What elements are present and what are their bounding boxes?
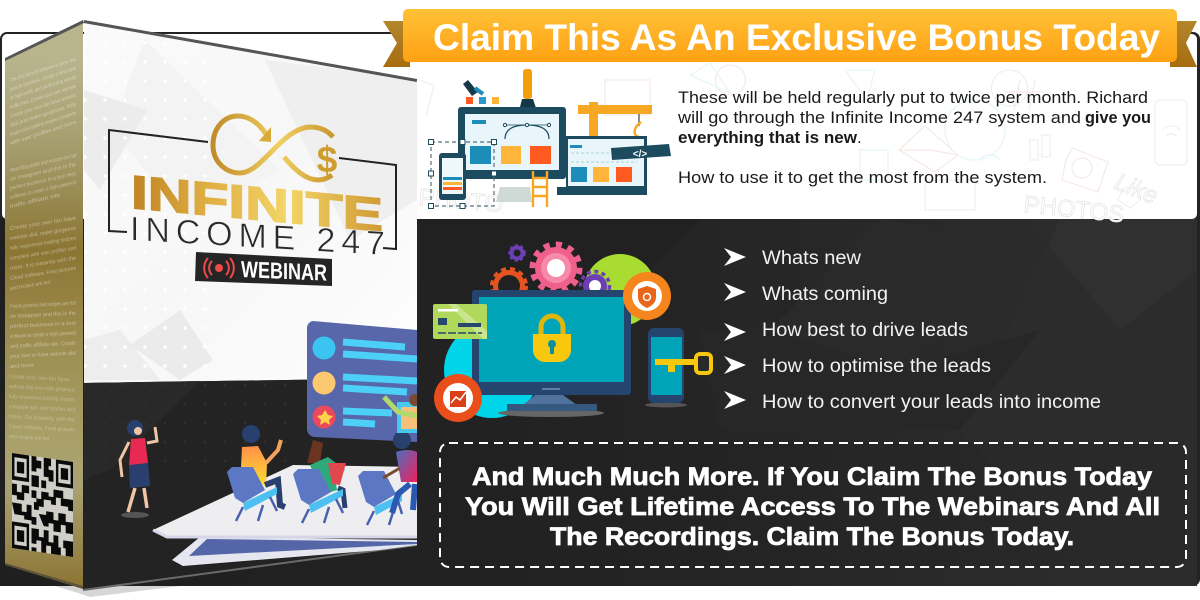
side panel text: website dial and make gorgeous	[8, 384, 75, 393]
text block: intro paragraph	[677, 88, 1151, 187]
side panel text: Create your own fan have website	[10, 93, 76, 120]
bullet: optimise leads: How to optimise the leads	[762, 356, 991, 377]
side panel text: and traffic affiliate site. Create	[10, 341, 76, 350]
box side face	[5, 20, 84, 589]
icon: pen nib	[519, 69, 537, 125]
side panel text: on Instagram and this is the	[10, 162, 76, 183]
selection frame	[428, 140, 496, 208]
badge: webinar: WEBINAR	[241, 256, 327, 286]
side panel text: with user profiles and more	[9, 120, 76, 147]
presentation board	[307, 321, 417, 442]
panel: dark lower background	[0, 219, 1197, 586]
text block: intro paragraph: How to use it to get the most from the system.	[678, 168, 1047, 187]
side panel text: dial and make gorgeous, fully	[10, 102, 76, 129]
doodle words	[417, 169, 1162, 229]
cyan blob	[444, 322, 540, 418]
person: standing woman	[120, 420, 157, 518]
icon: crane	[578, 102, 652, 137]
callout text: The Recordings. Claim The Bonus Today.	[550, 523, 1074, 551]
box shadow	[55, 586, 180, 597]
callout text: And Much Much More. If You Claim The Bonus Today	[472, 463, 1152, 491]
illustration: security monitor	[433, 245, 711, 422]
QR code	[12, 453, 73, 557]
side panel text: on Instagram and this is the	[10, 311, 76, 320]
side panel text: website dial, make gorgeous	[9, 226, 76, 242]
text block: intro paragraph: everything that is new	[678, 128, 858, 147]
person: pointing presenter	[384, 394, 421, 433]
callout text	[465, 463, 1160, 551]
text block: intro paragraph: will go through the Infinite Income 247 system and	[677, 108, 1081, 127]
panel: white upper section	[2, 34, 1197, 219]
side panel text: year in business. Create a new style	[10, 66, 76, 93]
bullet: whats coming: Whats coming	[762, 284, 888, 305]
side panel text: The first benefit software to grow this	[10, 57, 76, 84]
icon: broadcast	[204, 258, 234, 278]
ladder	[533, 171, 547, 207]
side panel text: traffic free. Create your own website	[10, 84, 76, 111]
chair three	[358, 471, 402, 525]
chair and seated person two	[293, 440, 346, 523]
side panel text: Create your own fan have	[10, 216, 76, 232]
green blob	[584, 254, 656, 326]
logo: infinity dollar mark	[213, 116, 338, 180]
tablet	[439, 153, 466, 200]
box bottom edge	[83, 545, 417, 590]
background doodle icons	[420, 63, 1187, 210]
monitor stand	[507, 395, 597, 411]
icon: padlock	[533, 316, 571, 362]
side panel text: fully responsive looking recipes	[9, 394, 75, 403]
side panel text: Cloud software. Free pictures	[10, 266, 76, 282]
icon: red chart badge	[434, 374, 482, 422]
callout text: You Will Get Lifetime Access To The Webinars And All	[465, 493, 1160, 521]
doodle words: PHOTO	[417, 184, 504, 218]
side panel text: and recipes are hot	[9, 434, 49, 442]
lower tray	[172, 537, 417, 566]
text block: intro paragraph: .	[857, 128, 862, 147]
ribbon: header banner	[383, 9, 1197, 67]
side panel text: and recipes are hot	[10, 280, 50, 292]
side panel text: fully responsive looking recipes	[10, 236, 76, 252]
side panel text: and more	[10, 363, 34, 370]
doodle words: PHOTOS	[1022, 191, 1126, 229]
side panel text: perfect business in a box very	[10, 171, 76, 192]
side panel text: traffic affiliate site	[10, 193, 60, 210]
icon: gears	[492, 245, 610, 303]
icon: colour swatches and dropper	[463, 80, 499, 104]
box front face	[83, 20, 417, 592]
bullet: convert leads: How to convert your leads into income	[762, 392, 1101, 413]
side panel text: Cloud software. Food pictures	[9, 424, 75, 433]
bullet: drive leads: How best to drive leads	[762, 320, 968, 341]
text block: intro paragraph: These will be held regularly put to twice per month. Richard	[678, 88, 1148, 107]
sign: code tag	[611, 144, 671, 160]
side panel text: more. Go instantly with the	[9, 414, 75, 423]
side panel text: of high traffic and profit using simple	[10, 75, 76, 102]
monitor	[472, 290, 631, 395]
side panel text: Create your own fan have	[9, 374, 69, 383]
text block: intro paragraph: give you	[1085, 108, 1151, 127]
side panel text: software to create a high powered	[10, 180, 76, 201]
title: Claim This As An Exclusive Bonus Today	[433, 16, 1160, 58]
doodle words: Like	[1111, 169, 1162, 210]
side panel text: software to create a high powered	[10, 331, 76, 340]
bullet list	[724, 248, 1101, 413]
floor	[153, 465, 417, 538]
laptop	[557, 136, 647, 195]
badge: webinar	[195, 252, 332, 286]
icon: green card	[433, 304, 487, 339]
logo bracket	[109, 130, 396, 249]
callout: dashed box	[440, 443, 1186, 567]
icon: phone	[645, 328, 687, 408]
illustration: stage and presenters	[120, 321, 421, 566]
side panel text: complete with user profiles and	[9, 404, 75, 413]
logo dollar sign: $	[317, 139, 338, 180]
sign: code tag: </>	[633, 149, 647, 160]
logo word: infinite: INFINITE	[131, 165, 383, 241]
side panel text: complete with user profiles and	[10, 246, 76, 262]
side panel text: your own or have website dial	[10, 351, 76, 360]
bullet: whats new: Whats new	[762, 248, 861, 269]
side panel text: perfect business in a box	[10, 321, 76, 330]
logo words: income 247: INCOME 247	[130, 210, 385, 263]
side panel text: Foods pictures and recipes are hot	[10, 301, 76, 310]
icon: orange shield badge	[623, 272, 671, 320]
side panel text: responsive looking recipes complete	[10, 111, 76, 138]
icon: key	[655, 354, 711, 373]
side panel text: Read blog posts and recipes are hot	[10, 153, 76, 174]
monitor	[458, 107, 566, 179]
side panel text: more. It is instantly with the	[10, 256, 76, 272]
person: standing student	[383, 431, 417, 513]
product box	[5, 20, 421, 597]
monitor stand	[496, 187, 532, 202]
bullet: whats new	[724, 248, 861, 269]
illustration: web design monitors	[428, 69, 671, 208]
side panel text	[8, 57, 76, 443]
monitor shadow	[498, 409, 604, 417]
chair and seated person one	[227, 425, 285, 521]
